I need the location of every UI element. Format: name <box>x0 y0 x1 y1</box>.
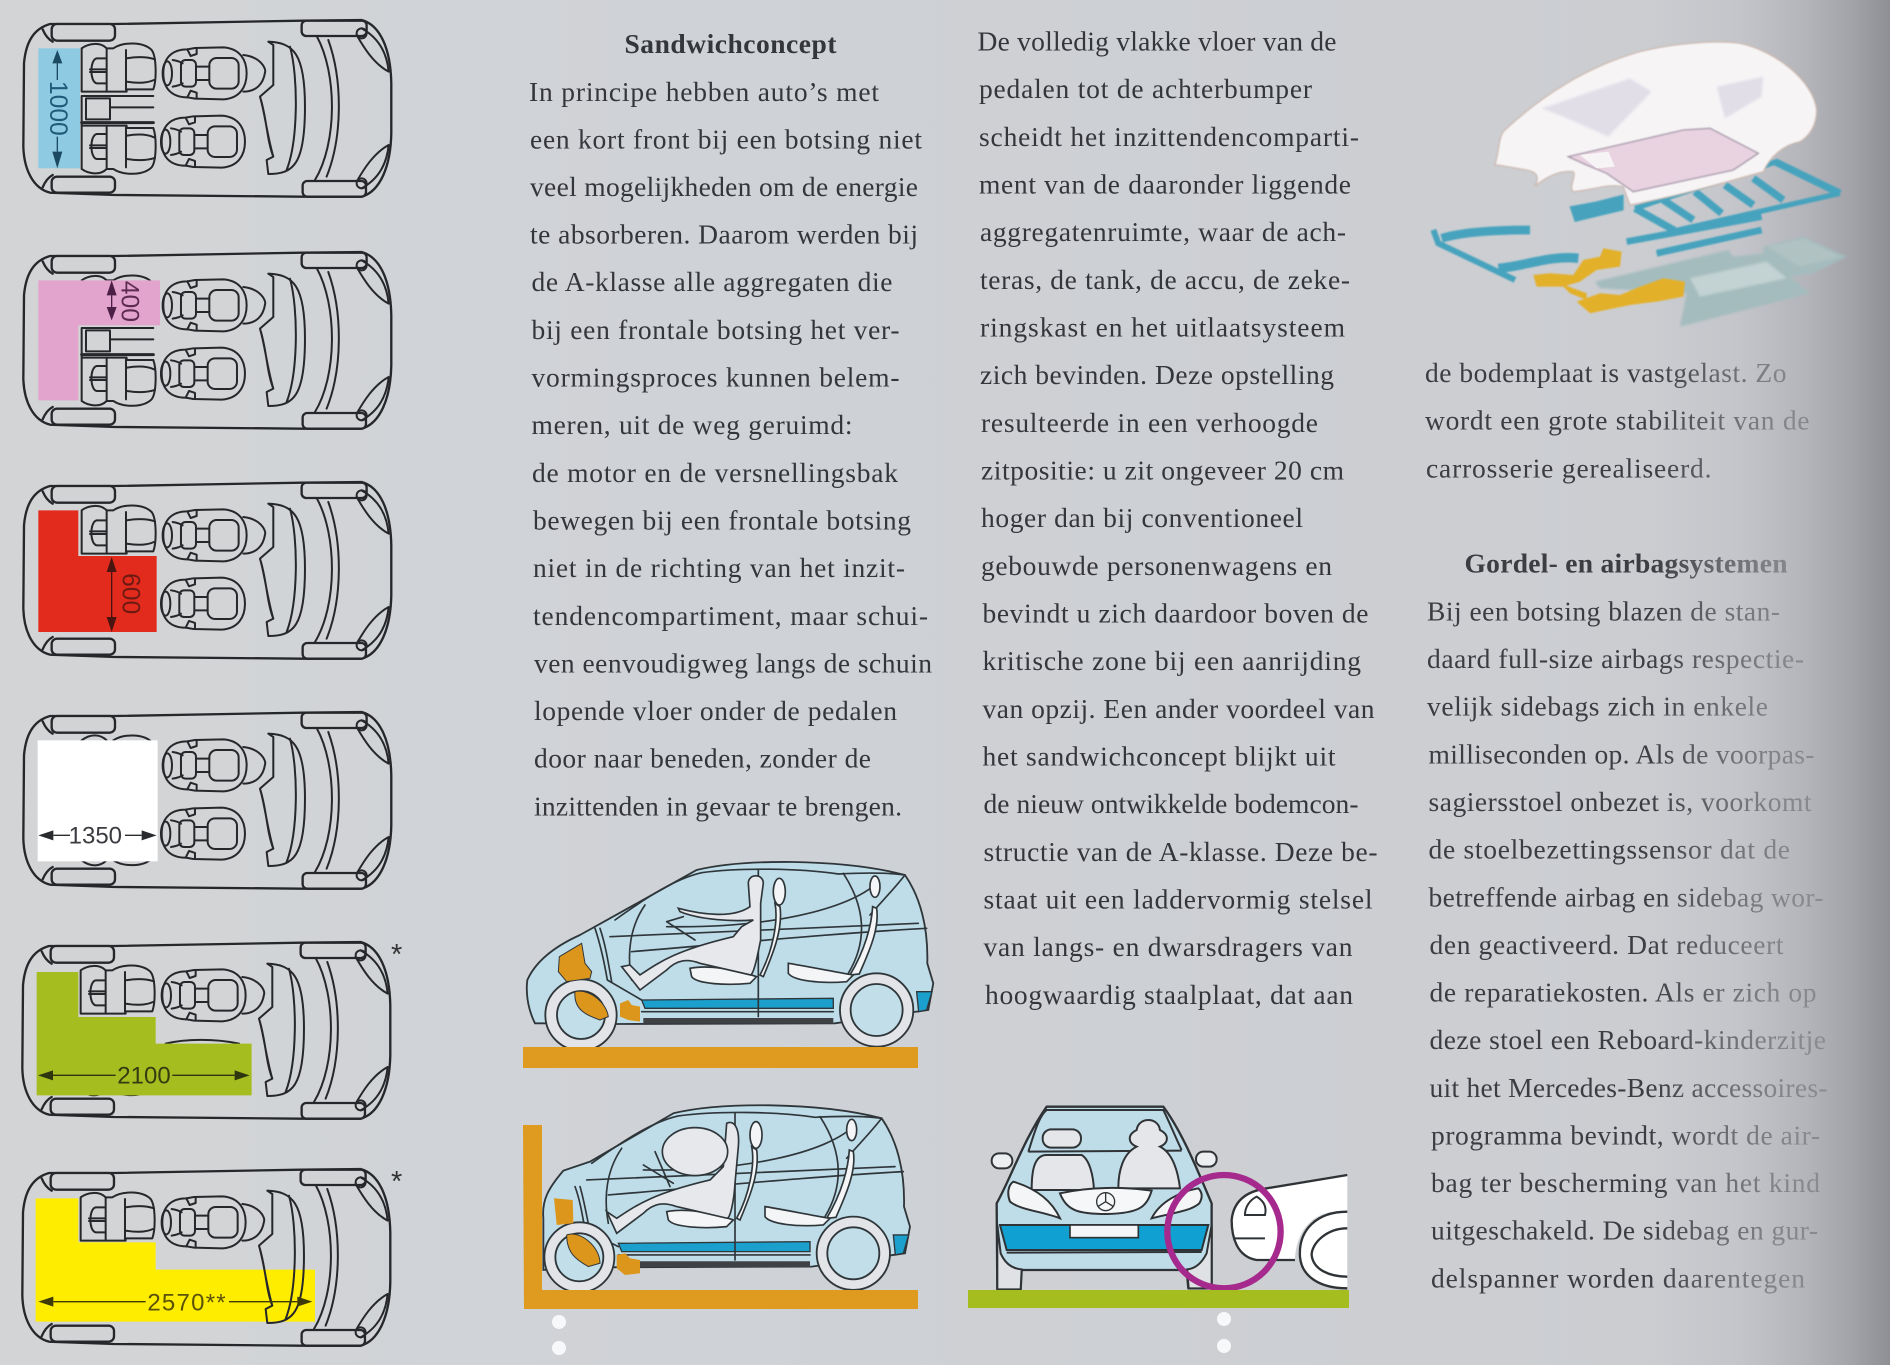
text column 2: van opzij. Een ander voordeel van <box>982 693 1375 724</box>
text column 2: pedalen tot de achterbumper <box>979 73 1312 104</box>
text column 2: ringskast en het uitlaatsysteem <box>980 312 1345 342</box>
text column 2: scheidt het inzittendencomparti- <box>979 121 1359 152</box>
text column 1: door naar beneden, zonder de <box>534 742 871 774</box>
text column 2: zich bevinden. Deze opstelling <box>980 359 1334 390</box>
Mercedes star <box>1097 1193 1115 1211</box>
text column 3: delspanner worden daarentegen <box>1431 1262 1805 1294</box>
text column 3: betreffende airbag en sidebag wor- <box>1428 882 1824 912</box>
car top view: 400 load width (pink) <box>23 252 391 429</box>
text column 2: van langs- en dwarsdragers van <box>984 931 1353 962</box>
teal ladder frame <box>1433 162 1840 280</box>
car top view: 1000 load width (blue) <box>23 20 391 197</box>
text column 3: programma bevindt, wordt de air- <box>1431 1120 1820 1150</box>
car top view: 2570 load length (yellow): 2570** <box>147 1289 226 1316</box>
text column 3: deze stoel een Reboard-kinderzitje <box>1430 1024 1826 1055</box>
driver figure <box>622 876 763 990</box>
text column 2 <box>978 26 1378 1010</box>
text column 1: veel mogelijkheden om de energie <box>530 171 918 202</box>
airbag and driver figure <box>607 1122 739 1233</box>
car top view: 1000 load width (blue): 1000 <box>44 81 71 136</box>
floor bar: green <box>968 1290 1349 1308</box>
text column 1: tendencompartiment, maar schui- <box>533 600 928 631</box>
text column 2: kritische zone bij een aanrijding <box>982 645 1361 676</box>
car top view: 400 load width (pink): 400 <box>116 281 143 322</box>
text column 3: de reparatiekosten. Als er zich op <box>1430 976 1816 1008</box>
magenta impact circle <box>1167 1175 1281 1288</box>
windows <box>1542 77 1763 137</box>
text column 1: de motor en de versnellingsbak <box>532 457 898 488</box>
side view car: frontal collision <box>543 1105 910 1292</box>
white body shell <box>1495 42 1817 205</box>
front view car with side-impact <box>992 1107 1347 1289</box>
asterisk: yellow car note: * <box>391 1166 402 1198</box>
text column 2: het sandwichconcept blijkt uit <box>982 740 1336 772</box>
side view car: normal driving <box>527 862 933 1051</box>
body <box>527 862 933 1024</box>
text column 1: de A-klasse alle aggregaten die <box>532 266 892 297</box>
asterisk: green car note: * <box>391 939 402 971</box>
text column 3: Bij een botsing blazen de stan- <box>1427 596 1780 626</box>
text column 1: bewegen bij een frontale botsing <box>533 504 911 536</box>
body <box>543 1105 910 1270</box>
text column 2: staat uit een laddervormig stelsel <box>984 884 1373 914</box>
text column 2: De volledig vlakke vloer van de <box>978 26 1336 56</box>
text column 2: de nieuw ontwikkelde bodemcon- <box>984 788 1358 819</box>
car top view: 2100 load length (green) <box>22 942 390 1119</box>
car top view: 600 load length (red): 600 <box>116 573 143 614</box>
grey-teal floor plates <box>1595 237 1847 327</box>
text column 1: meren, uit de weg geruimd: <box>532 409 852 440</box>
text column 3 <box>1425 357 1828 1294</box>
text column 1: lopende vloer onder de pedalen <box>534 695 897 726</box>
wall and floor bars: orange <box>523 1125 918 1309</box>
text column 2: hoger dan bij conventioneel <box>981 502 1303 533</box>
text column 3: uit het Mercedes-Benz accessoires- <box>1430 1072 1828 1103</box>
front view body <box>997 1107 1212 1289</box>
front wheel <box>544 1222 614 1292</box>
text column 1: een kort front bij een botsing niet <box>530 124 922 154</box>
text column 1: te absorberen. Daarom werden bij <box>530 218 918 250</box>
text column 2: resulteerde in een verhoogde <box>981 407 1318 438</box>
text column 3: carrosserie gerealiseerd. <box>1426 452 1712 484</box>
car top view: 1350 load length (white) <box>23 712 391 889</box>
text column 2: bevindt u zich daardoor boven de <box>982 598 1368 628</box>
text column 3: milliseconden op. Als de voorpas- <box>1428 738 1814 770</box>
text column 3: velijk sidebags zich in enkele <box>1427 690 1768 722</box>
car top view: 2100 load length (green): 2100 <box>117 1063 171 1090</box>
heading: Sandwichconcept: Sandwichconcept <box>624 28 837 59</box>
text column 1: vormingsproces kunnen belem- <box>532 362 900 392</box>
text column 1: bij een frontale botsing het ver- <box>532 314 900 345</box>
text column 3: bag ter bescherming van het kind <box>1431 1167 1820 1198</box>
front wheel <box>545 979 617 1051</box>
text column 3: sagiersstoel onbezet is, voorkomt <box>1428 786 1812 817</box>
pink floor panel <box>1568 128 1758 192</box>
text column 2: zitpositie: u zit ongeveer 20 cm <box>981 454 1344 486</box>
text column 3: uitgeschakeld. De sidebag en gur- <box>1431 1214 1818 1246</box>
text column 2: aggregatenruimte, waar de ach- <box>980 216 1346 247</box>
text column 3: wordt een grote stabiliteit van de <box>1425 404 1810 436</box>
text column 2: ment van de daaronder liggende <box>979 168 1351 200</box>
car top view: 600 load length (red) <box>23 482 391 659</box>
car top view: 2570 load length (yellow) <box>22 1169 390 1346</box>
heading: Gordel- en airbagsystemen: Gordel- en airbagsystemen <box>1464 548 1788 578</box>
text column 1: niet in de richting van het inzit- <box>533 552 905 583</box>
text column 1: In principe hebben auto’s met <box>529 76 879 107</box>
second car, side <box>1232 1175 1347 1288</box>
text column 1: inzittenden in gevaar te brengen. <box>534 790 902 822</box>
floor bar: orange <box>523 1047 918 1068</box>
white dots: left <box>552 1315 566 1355</box>
text column 3: de stoelbezettingssensor dat de <box>1428 834 1790 864</box>
text column 3: daard full-size airbags respectie- <box>1427 643 1804 674</box>
engine and gearbox <box>558 943 592 982</box>
blue bumper band <box>1000 1225 1208 1250</box>
text column 3: den geactiveerd. Dat reduceert <box>1430 929 1784 960</box>
engine and gearbox <box>554 1198 573 1225</box>
text column 2: gebouwde personenwagens en <box>981 550 1332 581</box>
gold crash members <box>1533 248 1685 313</box>
text column 1: ven eenvoudigweg langs de schuin <box>534 648 932 678</box>
exploded view: body shell and floor structure <box>1433 42 1847 327</box>
text column 2: structie van de A-klasse. Deze be- <box>984 836 1378 867</box>
text column 1 <box>529 28 932 822</box>
car top view: 1350 load length (white): 1350 <box>69 823 122 850</box>
text column 2: hoogwaardig staalplaat, dat aan <box>985 979 1353 1010</box>
text column 3: de bodemplaat is vastgelast. Zo <box>1425 357 1786 388</box>
white dots: right <box>1217 1312 1231 1353</box>
text column 2: teras, de tank, de accu, de zeke- <box>980 264 1350 295</box>
